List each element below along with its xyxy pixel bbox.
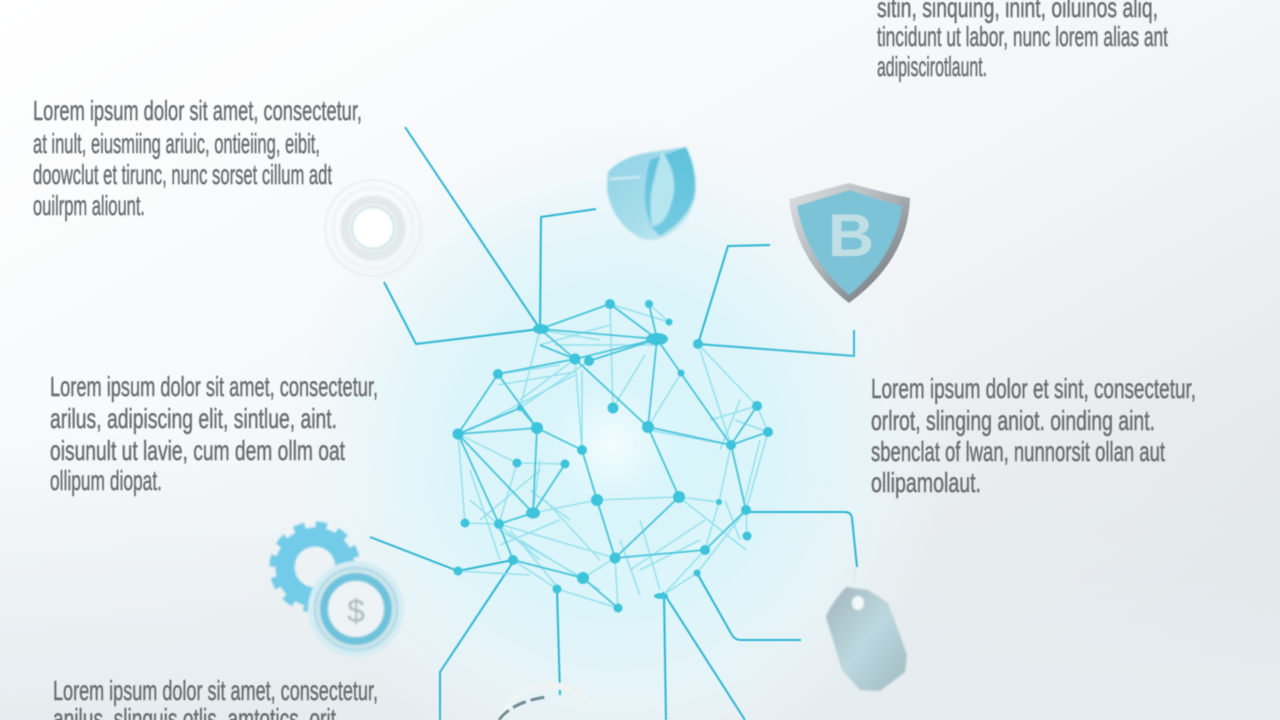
text block: top right: adipiscirotlaunt. xyxy=(877,51,987,82)
text block: middle left: Lorem ipsum dolor sit amet, consectetur, xyxy=(50,371,378,402)
text block: middle left: ollipum diopat. xyxy=(50,465,162,496)
coin xyxy=(308,561,404,657)
icon: tag xyxy=(826,568,907,691)
bitcoin glyph: B xyxy=(828,202,874,269)
arrow: node to right text xyxy=(698,330,854,356)
icon: half shield xyxy=(607,147,696,240)
gear xyxy=(274,526,356,608)
arrow: gear to lower-left nodes xyxy=(370,537,513,571)
text block: lower left: Lorem ipsum dolor sit amet, consectetur, xyxy=(53,675,378,706)
connector lines xyxy=(370,127,857,720)
text block: middle right xyxy=(871,373,1196,498)
text block: lower left xyxy=(53,675,378,720)
text block: middle right: orlrot, slinging aniot. oinding aint. xyxy=(871,405,1155,436)
arrow: node straight down xyxy=(664,595,666,720)
arrow: node to bottom ring xyxy=(557,589,560,695)
text block: upper left: Lorem ipsum dolor sit amet, consectetur, xyxy=(33,95,362,126)
icon: blue gear with coin: $ xyxy=(347,593,365,629)
text block: middle left: oisunult ut lavie, cum dem ollm oat xyxy=(50,435,345,466)
text block: top right xyxy=(877,0,1168,82)
network sphere xyxy=(452,299,773,612)
arrow: node to tag top xyxy=(746,512,857,567)
icon: faint ring gear xyxy=(325,180,421,276)
arrow: node to lower-left xyxy=(440,562,513,720)
icon: bitcoin shield xyxy=(789,183,910,303)
sphere strong edges xyxy=(458,304,768,608)
arrow: upper-left diagonal to hub xyxy=(405,127,540,329)
arrow: hub to half shield xyxy=(540,209,596,329)
text block: upper left: at inult, eiusmiing ariuic, ontieiing, eibit, xyxy=(33,128,320,159)
text block: middle left xyxy=(50,371,378,496)
arrow: node to bitcoin shield xyxy=(698,245,770,344)
icon: bottom ring xyxy=(499,685,590,720)
text block: middle left: arilus, adipiscing elit, sintlue, aint. xyxy=(50,403,337,434)
arrow: hub to ring gear xyxy=(384,282,540,344)
text block: upper left: ouilrpm aliount. xyxy=(33,190,145,221)
arrow: node diagonal down xyxy=(663,592,745,720)
sphere faint edges xyxy=(458,304,768,608)
sphere nodes xyxy=(452,299,773,612)
text block: middle right: ollipamolaut. xyxy=(871,467,981,498)
icon: blue gear with coin xyxy=(274,526,404,657)
text block: upper left: doowclut et tirunc, nunc sorset cillum adt xyxy=(33,159,332,190)
arrow: node to tag side xyxy=(697,573,801,640)
text block: upper left xyxy=(33,95,362,221)
